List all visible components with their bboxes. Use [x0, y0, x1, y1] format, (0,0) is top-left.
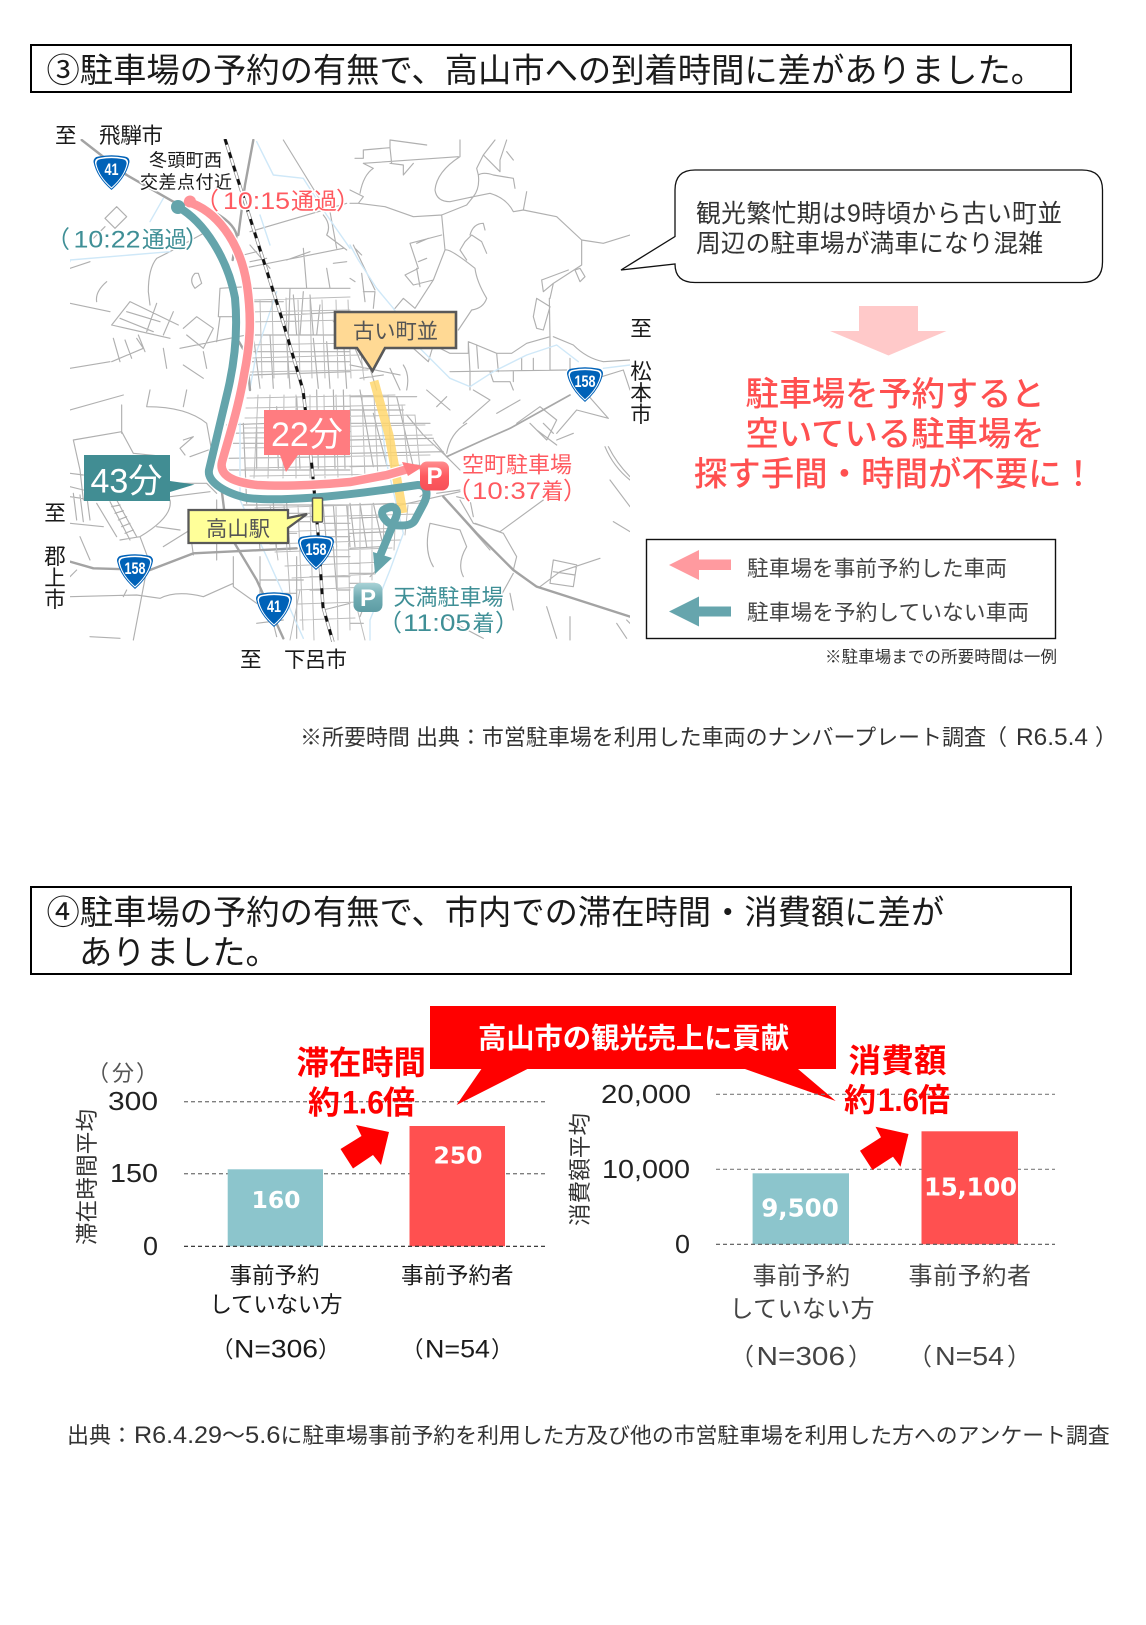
y axis title: 滞在時間平均	[75, 1109, 100, 1245]
label: to Hida city: 飛騨市	[99, 124, 163, 148]
label: to Matsumoto city	[630, 317, 652, 427]
gridlines	[184, 1102, 545, 1174]
note: example time: ※駐車場までの所要時間は一例	[825, 648, 1057, 666]
chart: spending	[568, 1079, 1055, 1371]
label: stay time ratio	[296, 1045, 426, 1120]
category labels: N=54	[935, 1341, 1004, 1371]
map: road network	[70, 140, 630, 640]
label: to Gero city: 至	[240, 648, 262, 672]
legend: non-reserved arrow	[669, 596, 731, 626]
route: non-reserved vehicle (teal)	[171, 200, 426, 574]
label: pass time 10:15: 10:15	[223, 188, 290, 215]
arrow: stay time increase	[340, 1125, 389, 1168]
label: to Gujo city: 上	[44, 566, 66, 590]
icon: route shield 41 south: 41	[267, 597, 281, 616]
bar: with reservation	[410, 1126, 505, 1246]
label: spending ratio	[844, 1043, 950, 1118]
source: license plate survey: （	[985, 725, 1007, 750]
route: reserved vehicle (pink)	[184, 196, 424, 486]
source: questionnaire survey: ～	[222, 1422, 245, 1448]
callout: 22 minutes	[264, 410, 350, 472]
category labels: ）	[848, 1344, 872, 1371]
arrow: down	[830, 306, 946, 356]
label: Soramachi parking arrival: 着	[542, 479, 564, 504]
category labels: 事前予約	[752, 1263, 850, 1290]
label: to Gujo city: 至	[44, 502, 66, 526]
label: pass time 10:15: ）	[336, 188, 360, 215]
legend: reserved text: 駐車場を事前予約した車両	[747, 556, 1007, 581]
icon: parking P teal: P	[360, 585, 376, 612]
bar: without reservation	[753, 1173, 849, 1244]
icon: route shield 158 east: 158	[574, 372, 596, 391]
source: license plate survey: R6.5.4	[1016, 724, 1088, 751]
source: questionnaire survey: R6.4.29	[134, 1422, 222, 1449]
speech bubble: congestion note: 観光繁忙期は9時頃から古い町並	[696, 200, 1062, 228]
label: pass time 10:15	[195, 188, 360, 215]
icon: Takayama station marker	[312, 498, 322, 522]
heading: section 3 title: ③駐車場の予約の有無で、高山市への到着時間に差がありました。	[46, 53, 1044, 90]
label: spending ratio: 1.6	[878, 1082, 919, 1118]
heading: section 4 title	[31, 887, 1071, 974]
icon: route shield 158 west	[117, 554, 153, 589]
label: intersection name: 交差点付近	[140, 172, 232, 192]
value 9,500: 9,500	[761, 1194, 839, 1222]
label: to Matsumoto city: 松	[630, 360, 652, 384]
label: Soramachi parking arrival: ）	[563, 478, 587, 505]
label: Soramachi parking arrival: （	[447, 478, 471, 505]
callout: old town	[335, 312, 456, 371]
map: railway line	[225, 139, 333, 642]
label: pass time 10:22: （	[46, 226, 70, 254]
source: license plate survey: ※所要時間 出典：市営駐車場を利用した車両のナンバープレート調査	[300, 725, 986, 750]
map: old town street highlight	[374, 381, 403, 513]
label: Tenman parking arrival	[378, 585, 519, 637]
category labels: 事前予約者	[401, 1264, 514, 1288]
label: Soramachi parking arrival: 空町駐車場	[462, 452, 572, 478]
legend	[646, 540, 1056, 638]
source: license plate survey: ）	[1095, 725, 1117, 750]
category labels: 事前予約者	[908, 1263, 1031, 1290]
label: to Gero city	[240, 648, 347, 672]
label: to Matsumoto city: 市	[630, 403, 652, 427]
value 15,100: 15,100	[924, 1172, 1017, 1202]
label: Tenman parking arrival: （	[378, 610, 402, 637]
label: pass time 10:22	[46, 226, 209, 254]
label: pass time 10:22: ）	[185, 226, 209, 254]
callout: Takayama station	[188, 510, 307, 543]
label: intersection name: 冬頭町西	[149, 150, 222, 170]
y axis ticks: 20,000	[601, 1079, 691, 1109]
label: Tenman parking arrival: 11:05	[403, 610, 471, 637]
icon: route shield 41 north	[94, 155, 130, 190]
label: to Gujo city	[44, 502, 66, 612]
bar: with reservation	[922, 1131, 1018, 1244]
speech bubble: congestion note: 周辺の駐車場が満車になり混雑	[696, 230, 1043, 258]
label: pass time 10:15: 通過	[291, 188, 337, 214]
icon: route shield 158 station	[298, 535, 334, 570]
y axis unit: （	[87, 1061, 109, 1086]
text block: reservation benefit: 駐車場を予約すると	[746, 376, 1044, 414]
text block: reservation benefit: 空いている駐車場を	[746, 416, 1044, 454]
callout: contribution to tourism sales	[430, 1006, 836, 1105]
category labels: 事前予約	[230, 1264, 320, 1288]
category labels: ）	[491, 1338, 514, 1362]
label: to Gujo city: 郡	[44, 545, 66, 569]
y axis ticks: 150	[110, 1158, 158, 1188]
icon: route shield 158 west: 158	[124, 559, 146, 578]
gridlines	[716, 1094, 1055, 1169]
label: to Matsumoto city: 本	[630, 382, 652, 406]
category labels: ）	[1007, 1344, 1031, 1371]
label: stay time ratio: 1.6	[342, 1084, 384, 1120]
label: Tenman parking arrival: 着	[472, 611, 495, 636]
value 250: 250	[433, 1142, 483, 1170]
icon: parking P red: P	[426, 463, 443, 490]
legend: reserved arrow	[669, 550, 731, 580]
label: to Gero city: 下呂市	[284, 648, 347, 672]
legend: non-reserved text: 駐車場を予約していない車両	[747, 600, 1029, 625]
category labels: （	[211, 1338, 234, 1362]
category labels: ）	[318, 1338, 341, 1362]
icon: parking P red	[420, 462, 449, 490]
icon: route shield 158 station: 158	[306, 540, 326, 559]
label: Soramachi parking arrival: 10:37	[472, 478, 541, 505]
category labels	[730, 1263, 1031, 1371]
label: stay time ratio: 約	[308, 1084, 340, 1120]
callout: contribution to tourism sales: 高山市の観光売上に貢献	[478, 1022, 789, 1054]
value 160: 160	[251, 1186, 301, 1214]
arrow: spending increase	[860, 1127, 908, 1170]
source: questionnaire survey: に駐車場事前予約を利用した方及び他の市営駐車場を利用した方へのアンケート調査	[280, 1423, 1110, 1448]
category labels: （	[908, 1344, 932, 1371]
y axis ticks: 10,000	[602, 1154, 690, 1184]
y axis ticks: 0	[143, 1231, 158, 1261]
icon: route shield 41 north: 41	[104, 160, 118, 179]
panel: route map	[44, 124, 652, 672]
label: pass time 10:22: 10:22	[74, 226, 140, 254]
label: pass time 10:22: 通過	[142, 228, 187, 252]
y axis ticks: 0	[675, 1229, 690, 1259]
category labels	[210, 1264, 514, 1364]
category labels: していない方	[730, 1296, 874, 1323]
y axis ticks	[601, 1079, 691, 1259]
callout: 43 minutes	[84, 455, 194, 501]
category labels: （	[730, 1344, 754, 1371]
label: stay time ratio: 倍	[383, 1084, 415, 1120]
label: stay time ratio: 滞在時間	[296, 1045, 426, 1081]
bar: without reservation	[228, 1169, 323, 1246]
text block: reservation benefit	[694, 376, 1095, 494]
heading: section 4 title: ④駐車場の予約の有無で、市内での滞在時間・消費額に差が	[46, 895, 944, 932]
label: spending ratio: 消費額	[848, 1043, 947, 1079]
y axis unit: 分	[112, 1061, 134, 1086]
label: to Hida city	[55, 124, 163, 148]
callout: 22 minutes: 22分	[271, 416, 343, 454]
callout: old town: 古い町並	[353, 320, 438, 344]
category labels: していない方	[210, 1292, 342, 1318]
source: questionnaire survey: 5.6	[245, 1422, 280, 1449]
callout: 43 minutes: 43分	[90, 462, 162, 500]
baseline	[716, 1243, 1055, 1245]
label: spending ratio: 約	[844, 1082, 876, 1118]
y axis unit: ）	[136, 1061, 158, 1086]
baseline	[184, 1245, 545, 1247]
callout: Takayama station: 高山駅	[206, 517, 270, 541]
label: to Hida city: 至	[55, 124, 77, 148]
category labels: （	[401, 1338, 424, 1362]
label: to Matsumoto city: 至	[630, 317, 652, 341]
label: Soramachi parking arrival	[447, 452, 587, 505]
category labels: N=306	[756, 1341, 845, 1371]
label: Tenman parking arrival: 天満駐車場	[394, 585, 504, 610]
chart: stay time	[75, 1061, 545, 1364]
source: questionnaire survey: 出典：	[67, 1423, 133, 1448]
label: spending ratio: 倍	[918, 1082, 950, 1118]
y axis ticks	[108, 1086, 158, 1261]
speech bubble: congestion note	[621, 170, 1102, 282]
icon: route shield 158 east	[567, 367, 603, 402]
category labels: N=54	[425, 1336, 490, 1364]
label: pass time 10:15: （	[195, 188, 219, 215]
label: to Gujo city: 市	[44, 588, 66, 612]
icon: parking P teal	[354, 583, 382, 612]
category labels: N=306	[234, 1336, 318, 1364]
text block: reservation benefit: 探す手間・時間が不要に！	[694, 456, 1095, 494]
y axis ticks: 300	[108, 1086, 158, 1116]
icon: route shield 41 south	[256, 592, 292, 627]
y axis unit	[87, 1061, 158, 1086]
y axis title: 消費額平均	[568, 1113, 593, 1226]
label: Tenman parking arrival: ）	[495, 610, 519, 637]
label: intersection name	[140, 150, 232, 192]
heading: section 4 title: ありました。	[79, 935, 279, 972]
